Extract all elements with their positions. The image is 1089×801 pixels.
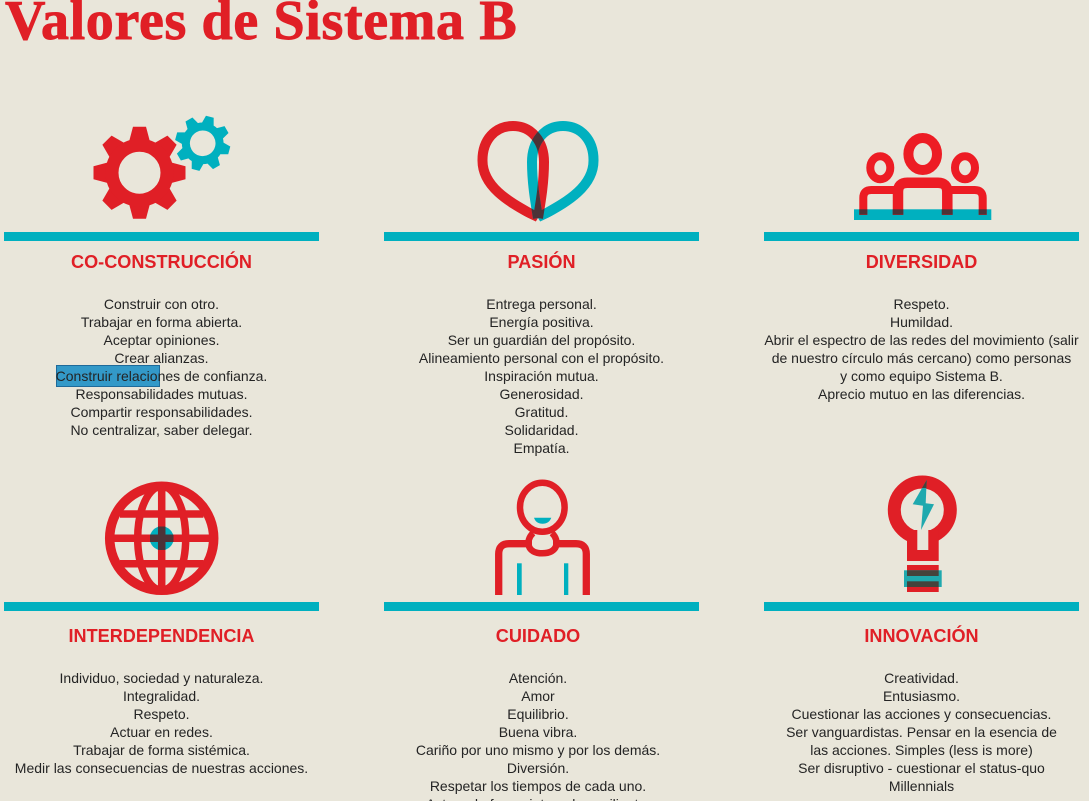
text: cuidado: Amor bbox=[521, 688, 555, 704]
text: innovacion: Millennials bbox=[889, 778, 954, 794]
divider bar: cuidado bbox=[384, 602, 699, 611]
text: interdependencia: Respeto. bbox=[133, 706, 190, 722]
text: diversidad: Abrir el espectro de las redes del movimiento (salir bbox=[764, 332, 1079, 348]
icon: heart bbox=[482, 126, 594, 218]
text: pasion bbox=[418, 296, 664, 456]
text: diversidad: Humildad. bbox=[890, 314, 953, 330]
heading: diversidad: DIVERSIDAD bbox=[866, 252, 977, 272]
text: innovacion bbox=[786, 670, 1057, 794]
divider bar: pasion bbox=[384, 232, 699, 241]
text: pasion: Entrega personal. bbox=[486, 296, 597, 312]
text: diversidad: Aprecio mutuo en las diferencias. bbox=[818, 386, 1025, 402]
text: co-construccion bbox=[56, 296, 267, 438]
text: diversidad bbox=[764, 296, 1079, 402]
text: innovacion: las acciones. Simples (less is more) bbox=[810, 742, 1033, 758]
text: interdependencia: Integralidad. bbox=[123, 688, 200, 704]
text: pasion: Ser un guardián del propósito. bbox=[448, 332, 635, 348]
text: cuidado: Respetar los tiempos de cada uno. bbox=[430, 778, 646, 794]
text: pasion: Solidaridad. bbox=[505, 422, 578, 438]
text: interdependencia: Actuar en redes. bbox=[110, 724, 213, 740]
text: diversidad: y como equipo Sistema B. bbox=[840, 368, 1003, 384]
text: co-construccion: Responsabilidades mutuas. bbox=[76, 386, 248, 402]
icon: light bulb bbox=[894, 480, 950, 592]
icon: gears bbox=[94, 110, 236, 219]
text: cuidado: Equilibrio. bbox=[507, 706, 569, 722]
divider bar: co-construccion bbox=[4, 232, 319, 241]
heading: cuidado: CUIDADO bbox=[496, 626, 580, 646]
divider bar: interdependencia bbox=[4, 602, 319, 611]
text: pasion: Alineamiento personal con el propósito. bbox=[419, 350, 664, 366]
text: diversidad: de nuestro círculo más cercano) como personas bbox=[772, 350, 1071, 366]
text: cuidado: Diversión. bbox=[507, 760, 569, 776]
text: interdependencia: Medir las consecuencias de nuestras acciones. bbox=[15, 760, 308, 776]
text: pasion: Energía positiva. bbox=[489, 314, 594, 330]
text: cuidado: Buena vibra. bbox=[499, 724, 577, 740]
divider bar: diversidad bbox=[764, 232, 1079, 241]
text: co-construccion: Construir con otro. bbox=[104, 296, 219, 312]
icon: people bbox=[854, 138, 991, 220]
text: cuidado bbox=[416, 670, 660, 801]
text: co-construccion: Trabajar en forma abierta. bbox=[81, 314, 242, 330]
text: cuidado: Atención. bbox=[509, 670, 567, 686]
icon: person bbox=[499, 483, 586, 595]
text: interdependencia: Individuo, sociedad y naturaleza. bbox=[60, 670, 263, 686]
divider bar: innovacion bbox=[764, 602, 1079, 611]
text: interdependencia bbox=[15, 670, 308, 776]
heading: pasion: PASIÓN bbox=[507, 252, 576, 272]
icon: teal gear bbox=[169, 110, 236, 177]
text: pasion: Inspiración mutua. bbox=[484, 368, 599, 384]
text: pasion: Empatía. bbox=[513, 440, 570, 456]
heading: innovacion: INNOVACIÓN bbox=[864, 626, 979, 646]
text: pasion: Generosidad. bbox=[499, 386, 584, 402]
text selection highlight bbox=[56, 365, 160, 387]
text: innovacion: Ser disruptivo - cuestionar el status-quo bbox=[798, 760, 1045, 776]
text: co-construccion: Compartir responsabilidades. bbox=[70, 404, 253, 420]
text: co-construccion: No centralizar, saber delegar. bbox=[70, 422, 253, 438]
text: diversidad: Respeto. bbox=[893, 296, 950, 312]
heading: co-construccion: CO-CONSTRUCCIÓN bbox=[71, 252, 252, 272]
text: innovacion: Cuestionar las acciones y consecuencias. bbox=[792, 706, 1051, 722]
text: pasion: Gratitud. bbox=[515, 404, 568, 420]
heading: interdependencia: INTERDEPENDENCIA bbox=[68, 626, 254, 646]
text: innovacion: Creatividad. bbox=[884, 670, 959, 686]
text: co-construccion: Crear alianzas. bbox=[114, 350, 209, 366]
icon: red gear bbox=[94, 127, 186, 219]
text: co-construccion: Construir relaciones de confianza. bbox=[56, 368, 267, 384]
text: cuidado: Cariño por uno mismo y por los demás. bbox=[416, 742, 660, 758]
text: innovacion: Entusiasmo. bbox=[883, 688, 960, 704]
text: co-construccion: Aceptar opiniones. bbox=[104, 332, 219, 348]
icon: globe bbox=[110, 486, 214, 591]
text: interdependencia: Trabajar de forma sistémica. bbox=[73, 742, 250, 758]
text: innovacion: Ser vanguardistas. Pensar en la esencia de bbox=[786, 724, 1057, 740]
